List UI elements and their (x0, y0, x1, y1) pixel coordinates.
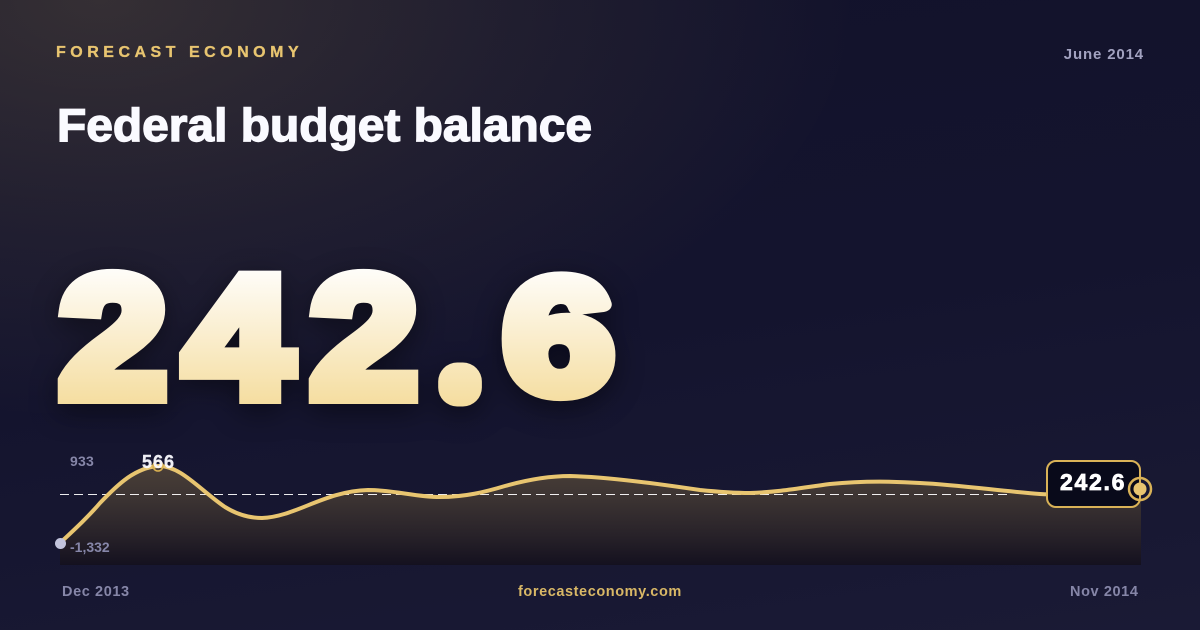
big value: . (454, 352, 466, 396)
peak marker (153, 461, 163, 471)
date label: June 2014 (1064, 46, 1144, 63)
current value callout (1046, 460, 1141, 508)
area fill (60, 466, 1141, 565)
axis max label: 933 (70, 453, 94, 469)
big value: 6 (504, 246, 613, 427)
axis min label: -1,332 (70, 539, 110, 555)
peak value label: 566 (142, 452, 175, 472)
big value: 2 (310, 241, 418, 433)
big value: 4 (184, 241, 292, 433)
title: Federal budget balance (57, 99, 592, 151)
current value callout: 242.6 (1060, 469, 1126, 495)
big value: 2 (59, 241, 167, 433)
start date: Dec 2013 (62, 584, 130, 600)
source site: forecasteconomy.com (518, 584, 682, 600)
trend line (60, 466, 1060, 543)
start marker (55, 538, 66, 549)
end date: Nov 2014 (1070, 584, 1138, 600)
reference dashed line (60, 494, 1007, 496)
brand label: FORECAST ECONOMY (56, 44, 303, 61)
